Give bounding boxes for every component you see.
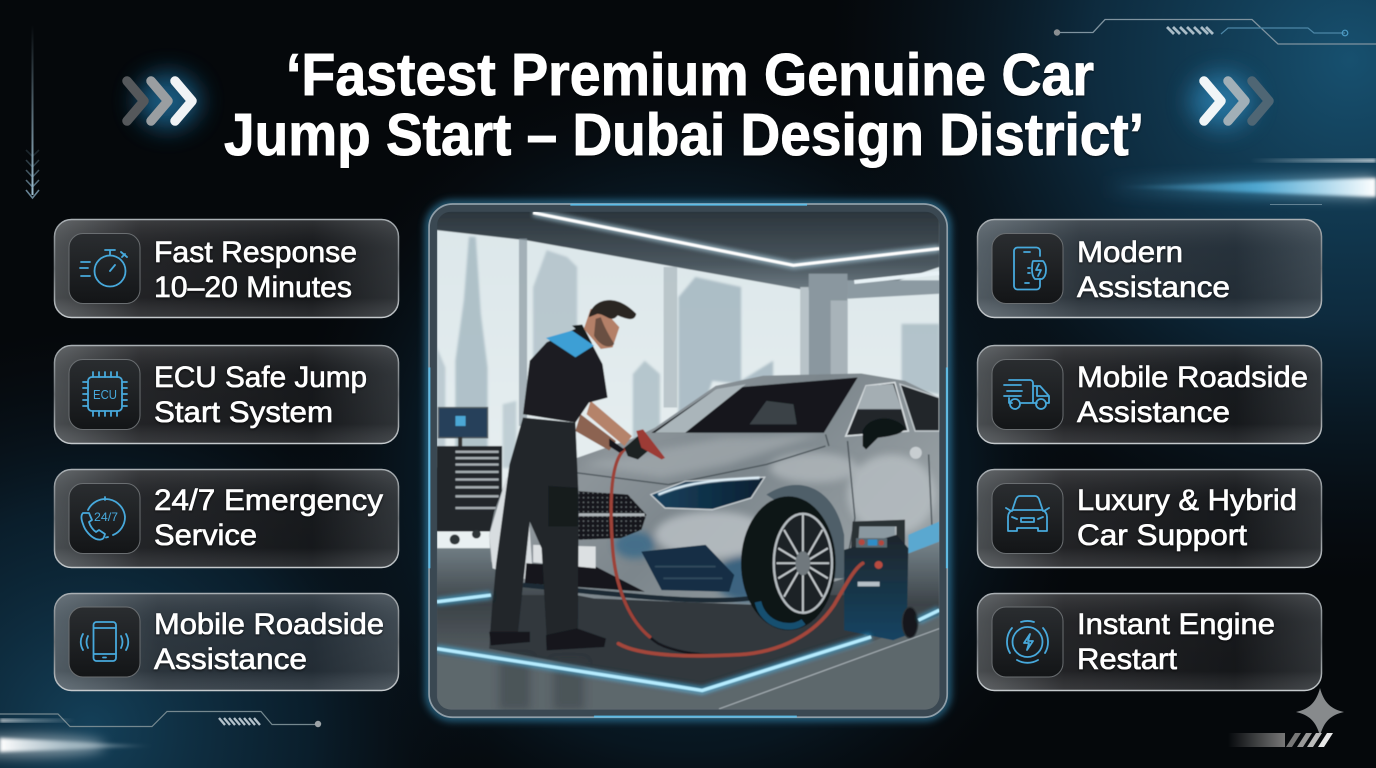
photo scene: [437, 212, 939, 710]
windows: [651, 377, 858, 433]
mirror: [863, 418, 905, 449]
ceiling neon: [533, 213, 939, 265]
tool cabinet: [437, 408, 502, 545]
panel: right feature 4: Restart: [1077, 643, 1177, 676]
car body: [489, 373, 939, 605]
panel: right feature 2: [978, 346, 1322, 444]
panel: left feature 4: [54, 594, 398, 690]
panel: central photo illustration: [429, 204, 947, 717]
panel: right feature 1: Modern: [1077, 236, 1183, 269]
panel: right feature 3: [978, 470, 1322, 568]
front wheel: [741, 496, 836, 630]
car shading: [577, 434, 939, 602]
panel: right feature 2: Mobile Roadside: [1077, 361, 1308, 394]
panel: right feature 4: Instant Engine: [1077, 608, 1275, 641]
frame neon edges: [429, 205, 947, 717]
icon: engine restart bolt: [1007, 621, 1048, 663]
sparkle icon: [1296, 688, 1344, 736]
chevrons: right of title: [1190, 73, 1269, 129]
icon: 24/7 phone: [82, 497, 125, 540]
title: [224, 42, 1144, 168]
panel: left feature 2: ECU Safe Jump: [154, 361, 367, 394]
icon: ECU chip: [83, 372, 127, 416]
jump starter machine: [844, 520, 918, 640]
panel: left feature 3: [54, 470, 398, 568]
plate and lower grille: [525, 563, 645, 592]
panel: right feature 3: Car Support: [1077, 519, 1247, 552]
panel: right feature 1: Assistance: [1077, 271, 1230, 304]
frame glow: [429, 204, 947, 717]
light flares: bottom left: [0, 719, 155, 757]
skyline: [437, 237, 939, 468]
circuit lines: bottom left: [0, 712, 321, 727]
icon: delivery truck: [1004, 380, 1049, 409]
panel: right feature 2: Assistance: [1077, 396, 1230, 429]
bumper line: [523, 585, 749, 600]
panel: right feature 4: [978, 594, 1322, 690]
chevrons: left of title: [127, 73, 200, 129]
front grille: [577, 491, 646, 540]
icon: car front: [1006, 496, 1049, 531]
panel: left feature 2: Start System: [154, 396, 333, 429]
icon: phone with assistance hand: [1014, 248, 1046, 290]
stripe bar: bottom right: [1228, 733, 1333, 747]
panel: left feature 1: 10–20 Minutes: [154, 271, 352, 304]
headlight: [651, 477, 765, 510]
ceiling: [437, 212, 939, 297]
icon: 24/7 phone: 24/7: [94, 510, 118, 524]
title: Jump Start – Dubai Design District’: [224, 102, 1144, 168]
icon: ECU chip: ECU: [93, 387, 117, 402]
icon: vibrating phone: [81, 622, 128, 661]
panel: left feature 4: Assistance: [154, 643, 307, 676]
floor: [437, 535, 939, 710]
panel: left feature 4: Mobile Roadside: [154, 608, 384, 641]
technician: [489, 300, 665, 650]
title: ‘Fastest Premium Genuine Car: [286, 42, 1094, 108]
panel: left feature 1: Fast Response: [154, 236, 357, 269]
panel: left feature 3: Service: [154, 519, 257, 552]
panel: left feature 2: [54, 346, 398, 444]
light flares: right: [1100, 159, 1376, 205]
decorative arrow: left vertical: [26, 25, 39, 198]
icon: stopwatch: [80, 250, 127, 286]
panel: left feature 1: [54, 220, 398, 318]
panel: right feature 1: [978, 220, 1322, 318]
panel: left feature 3: 24/7 Emergency: [154, 484, 383, 517]
floor neon lines: [437, 595, 939, 709]
circuit lines: top right: [1054, 20, 1376, 44]
jump cables: [611, 449, 863, 656]
photo frame: [429, 204, 947, 717]
panel: right feature 3: Luxury & Hybrid: [1077, 484, 1297, 517]
